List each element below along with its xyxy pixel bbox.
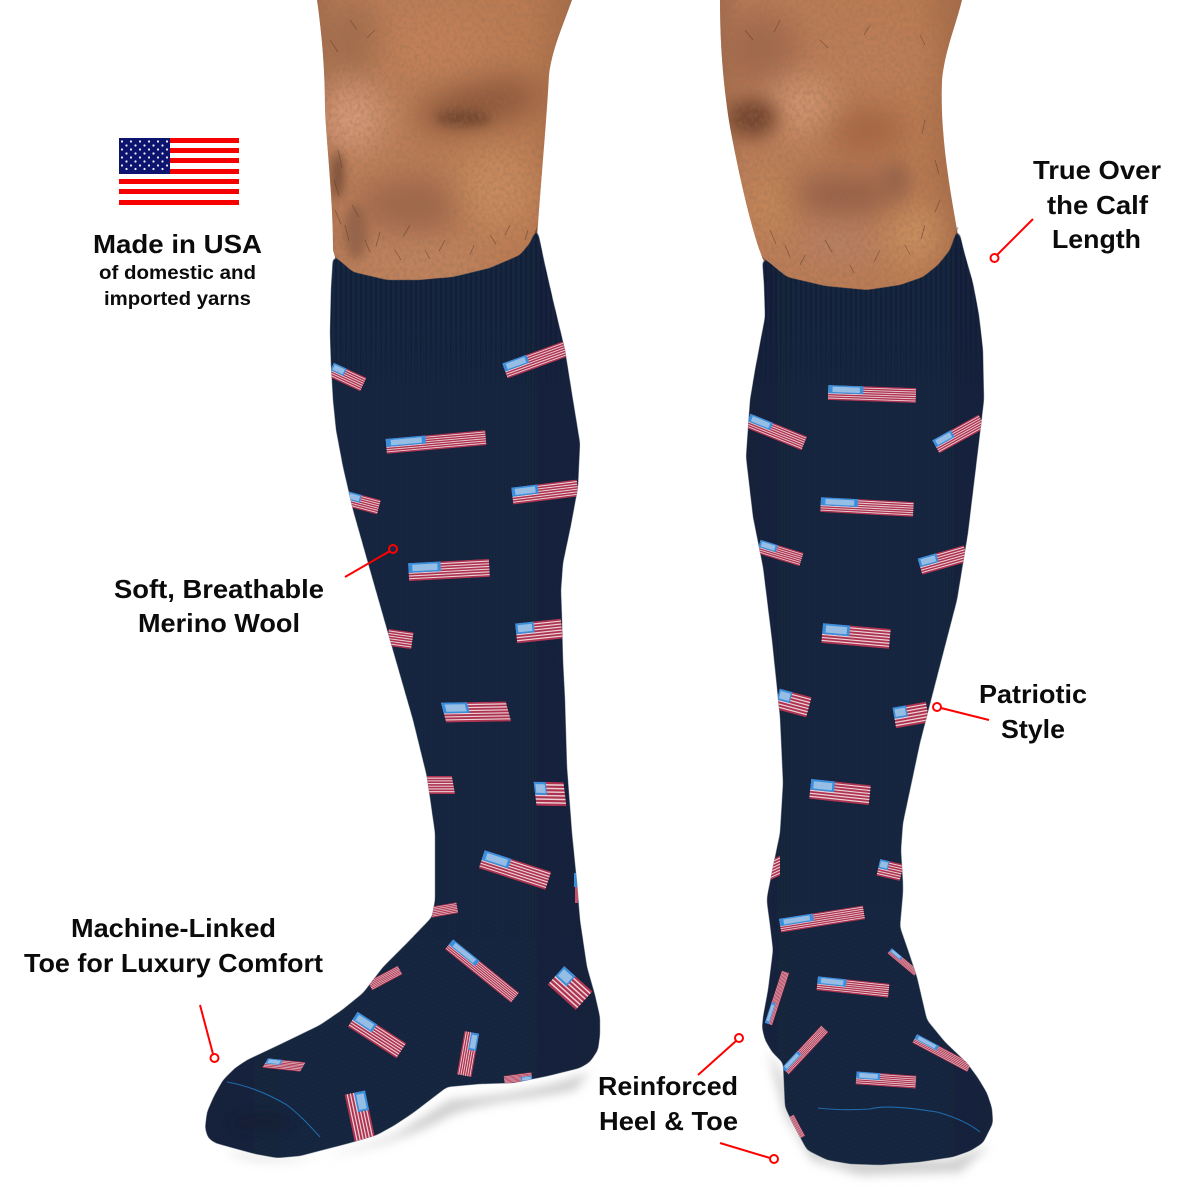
left sock [200, 225, 610, 1170]
sock knit texture [740, 225, 1000, 1170]
callout: Patriotic Style: Patriotic [979, 679, 1087, 709]
callout: Reinforced Heel and Toe: Reinforced [598, 1071, 738, 1101]
callout: Reinforced Heel and Toe [598, 1034, 778, 1163]
callout: Soft, Breathable Merino Wool [114, 545, 397, 638]
text: Made in USA [93, 229, 262, 310]
leg hair [745, 20, 940, 273]
sock body [205, 227, 600, 1158]
flags: right sock [745, 385, 986, 1139]
callout: Reinforced Heel and Toe: Heel & Toe [599, 1106, 738, 1136]
callout: Machine-Linked Toe: Toe for Luxury Comfort [24, 948, 323, 978]
callout: Soft, Breathable Merino Wool: Merino Wool [138, 608, 300, 638]
sock body [746, 227, 993, 1165]
callout: Patriotic Style [933, 679, 1087, 744]
foot shadows [225, 1050, 990, 1175]
right leg skin [720, 0, 962, 290]
sock knit texture [200, 225, 610, 1170]
callout: Patriotic Style: Style [1001, 714, 1065, 744]
leg hair [330, 20, 528, 260]
callout: True Over the Calf Length [990, 155, 1161, 262]
right sock [740, 225, 1000, 1170]
toe seam [227, 1082, 320, 1137]
text: Made in USA: imported yarns [104, 289, 251, 310]
callout: Machine-Linked Toe [24, 913, 323, 1062]
icon: USA flag [119, 138, 239, 205]
callout: True Over the Calf Length: True Over [1033, 155, 1161, 185]
callout: True Over the Calf Length: Length [1052, 224, 1141, 254]
flags: left sock [262, 342, 592, 1144]
text: Made in USA: Made in USA [93, 229, 262, 259]
callout: Soft, Breathable Merino Wool: Soft, Breathable [114, 574, 324, 604]
toe shading [278, 1118, 284, 1126]
callout: True Over the Calf Length: the Calf [1047, 190, 1148, 220]
toe seam [818, 1107, 980, 1132]
callout: Machine-Linked Toe: Machine-Linked [71, 913, 276, 943]
left leg skin [317, 0, 572, 280]
text: Made in USA: of domestic and [99, 263, 256, 284]
